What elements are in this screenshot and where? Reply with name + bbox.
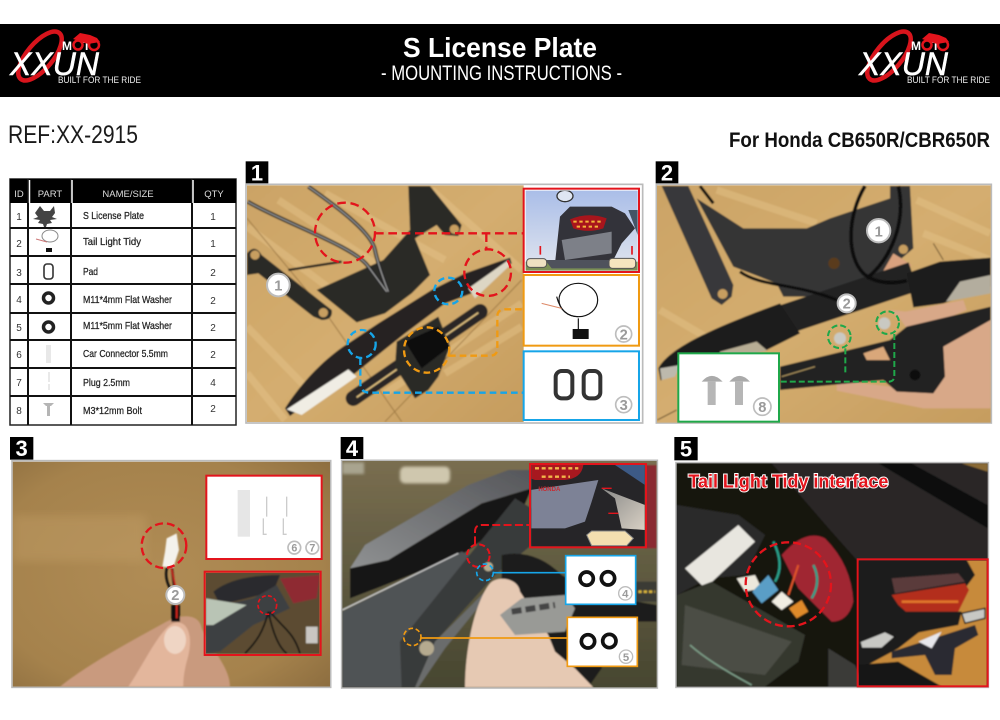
- callout: dashed circle: [142, 523, 186, 568]
- logo: XXUN left: BUILT FOR THE RIDE: [58, 75, 141, 86]
- table header: NAME/SIZE: [102, 189, 154, 200]
- ID column: 2: [16, 239, 22, 250]
- label 8: 8: [758, 400, 766, 416]
- labels 6 and 7: 7: [309, 543, 315, 555]
- label 3: 3: [620, 398, 628, 414]
- label 2: [166, 586, 184, 604]
- logo: XXUN left: M: [62, 39, 72, 53]
- step badge 2: 2: [661, 160, 673, 185]
- callout: red dashed: [315, 203, 523, 296]
- inset: installed plate photo: [855, 557, 990, 688]
- quantity column: 2: [210, 268, 216, 279]
- logo: XXUN right: [858, 25, 990, 87]
- labels 6 and 7: [288, 541, 319, 555]
- label 5: 5: [623, 652, 629, 664]
- photo: bracket on wood: [245, 183, 525, 423]
- ID column: 5: [16, 323, 22, 334]
- reference number: REF:XX-2915: [8, 121, 138, 149]
- label 1: 1: [875, 224, 883, 240]
- inset: M11x5 washers: [567, 617, 637, 666]
- callout: red dashed: [467, 525, 530, 567]
- quantity column: 4: [210, 378, 216, 389]
- part names: M11*4mm Flat Washer: [83, 294, 172, 306]
- labels 6 and 7: 6: [291, 543, 297, 555]
- inset: tail light tidy part: [524, 275, 639, 346]
- inset: tail detail photo: [530, 464, 646, 547]
- ID column: 6: [16, 350, 22, 361]
- step badge 3: [10, 436, 33, 461]
- inset: wires under tail photo: [203, 570, 322, 656]
- callout: orange line: [404, 628, 567, 646]
- label 2: [838, 294, 856, 312]
- step badge 3: 3: [16, 436, 28, 461]
- panel: step 3: [10, 436, 331, 687]
- title: S License Plate: [403, 32, 597, 63]
- part names: Plug 2.5mm: [83, 377, 130, 389]
- step badge 4: [341, 436, 363, 461]
- photo: connector in hand: [13, 462, 330, 687]
- logo: XXUN right: M: [911, 39, 921, 53]
- step badge 5: 5: [680, 436, 692, 461]
- callout text: Tail Light Tidy interface: [688, 471, 888, 492]
- logo: XXUN left: [9, 25, 141, 87]
- part names: [83, 210, 172, 417]
- part names: Car Connector 5.5mm: [83, 348, 168, 360]
- inset: pads: [524, 351, 639, 420]
- table header: [14, 189, 224, 200]
- step badge 2: [656, 160, 678, 185]
- quantity column: 1: [210, 239, 216, 250]
- ID column: 7: [16, 378, 22, 389]
- callout: blue line: [477, 564, 566, 581]
- label 2: 2: [843, 296, 851, 312]
- part names: Pad: [83, 266, 98, 278]
- inset: connector parts: [206, 476, 322, 559]
- step badge 1: 1: [251, 160, 263, 185]
- photo: mounting on bike: [340, 458, 660, 690]
- step badge 4: 4: [346, 436, 359, 461]
- logo: XXUN right: XXUN: [858, 46, 949, 82]
- inset: M3 bolts: [678, 353, 779, 422]
- label 1: 1: [274, 279, 282, 295]
- logo: XXUN right: BUILT FOR THE RIDE: [907, 75, 990, 86]
- part names: M11*5mm Flat Washer: [83, 320, 172, 332]
- label 2: 2: [620, 327, 628, 343]
- photo: wiring interface: [673, 460, 990, 690]
- callout: green dashed: [779, 311, 899, 382]
- header banner: [0, 24, 1000, 97]
- inset: tail detail photo: HONDA: [538, 487, 561, 493]
- part names: M3*12mm Bolt: [83, 405, 142, 417]
- part icons: [33, 206, 58, 416]
- quantity column: [210, 212, 216, 415]
- logo: XXUN left: T: [83, 39, 91, 53]
- subtitle: - MOUNTING INSTRUCTIONS -: [381, 62, 622, 85]
- logo: XXUN left: XXUN: [9, 46, 100, 82]
- parts table: [10, 179, 236, 425]
- inset: tail light photo: [524, 189, 639, 272]
- ID column: 8: [16, 406, 22, 417]
- step badge 1: [246, 160, 268, 185]
- ID column: 3: [16, 268, 22, 279]
- part names: S License Plate: [83, 210, 144, 222]
- table header: QTY: [204, 189, 224, 200]
- panel: step 1: [245, 160, 643, 423]
- ID column: 1: [16, 212, 22, 223]
- table header: ID: [14, 189, 24, 200]
- logo: XXUN right: T: [932, 39, 940, 53]
- callout: dashed circle: [746, 542, 831, 626]
- photo: bracket in hand: [653, 183, 993, 425]
- panel: step 4: [340, 436, 660, 690]
- label 1: [867, 219, 890, 242]
- callout: blue dashed: [348, 278, 523, 393]
- quantity column: 2: [210, 350, 216, 361]
- label 4: 4: [622, 589, 629, 601]
- part names: Tail Light Tidy: [83, 236, 142, 248]
- label 1: [267, 274, 290, 296]
- ID column: [16, 212, 22, 417]
- ID column: 4: [16, 295, 22, 306]
- quantity column: 1: [210, 212, 216, 223]
- callout: orange dashed: [404, 309, 523, 373]
- quantity column: 2: [210, 296, 216, 307]
- quantity column: 2: [210, 323, 216, 334]
- inset: M11x4 washers: [566, 556, 636, 604]
- panel: step 2: [653, 160, 993, 425]
- panel: step 5: [673, 436, 990, 690]
- step badge 5: [674, 436, 698, 461]
- table header: PART: [38, 189, 62, 200]
- quantity column: 2: [210, 404, 216, 415]
- label 2: 2: [171, 588, 179, 604]
